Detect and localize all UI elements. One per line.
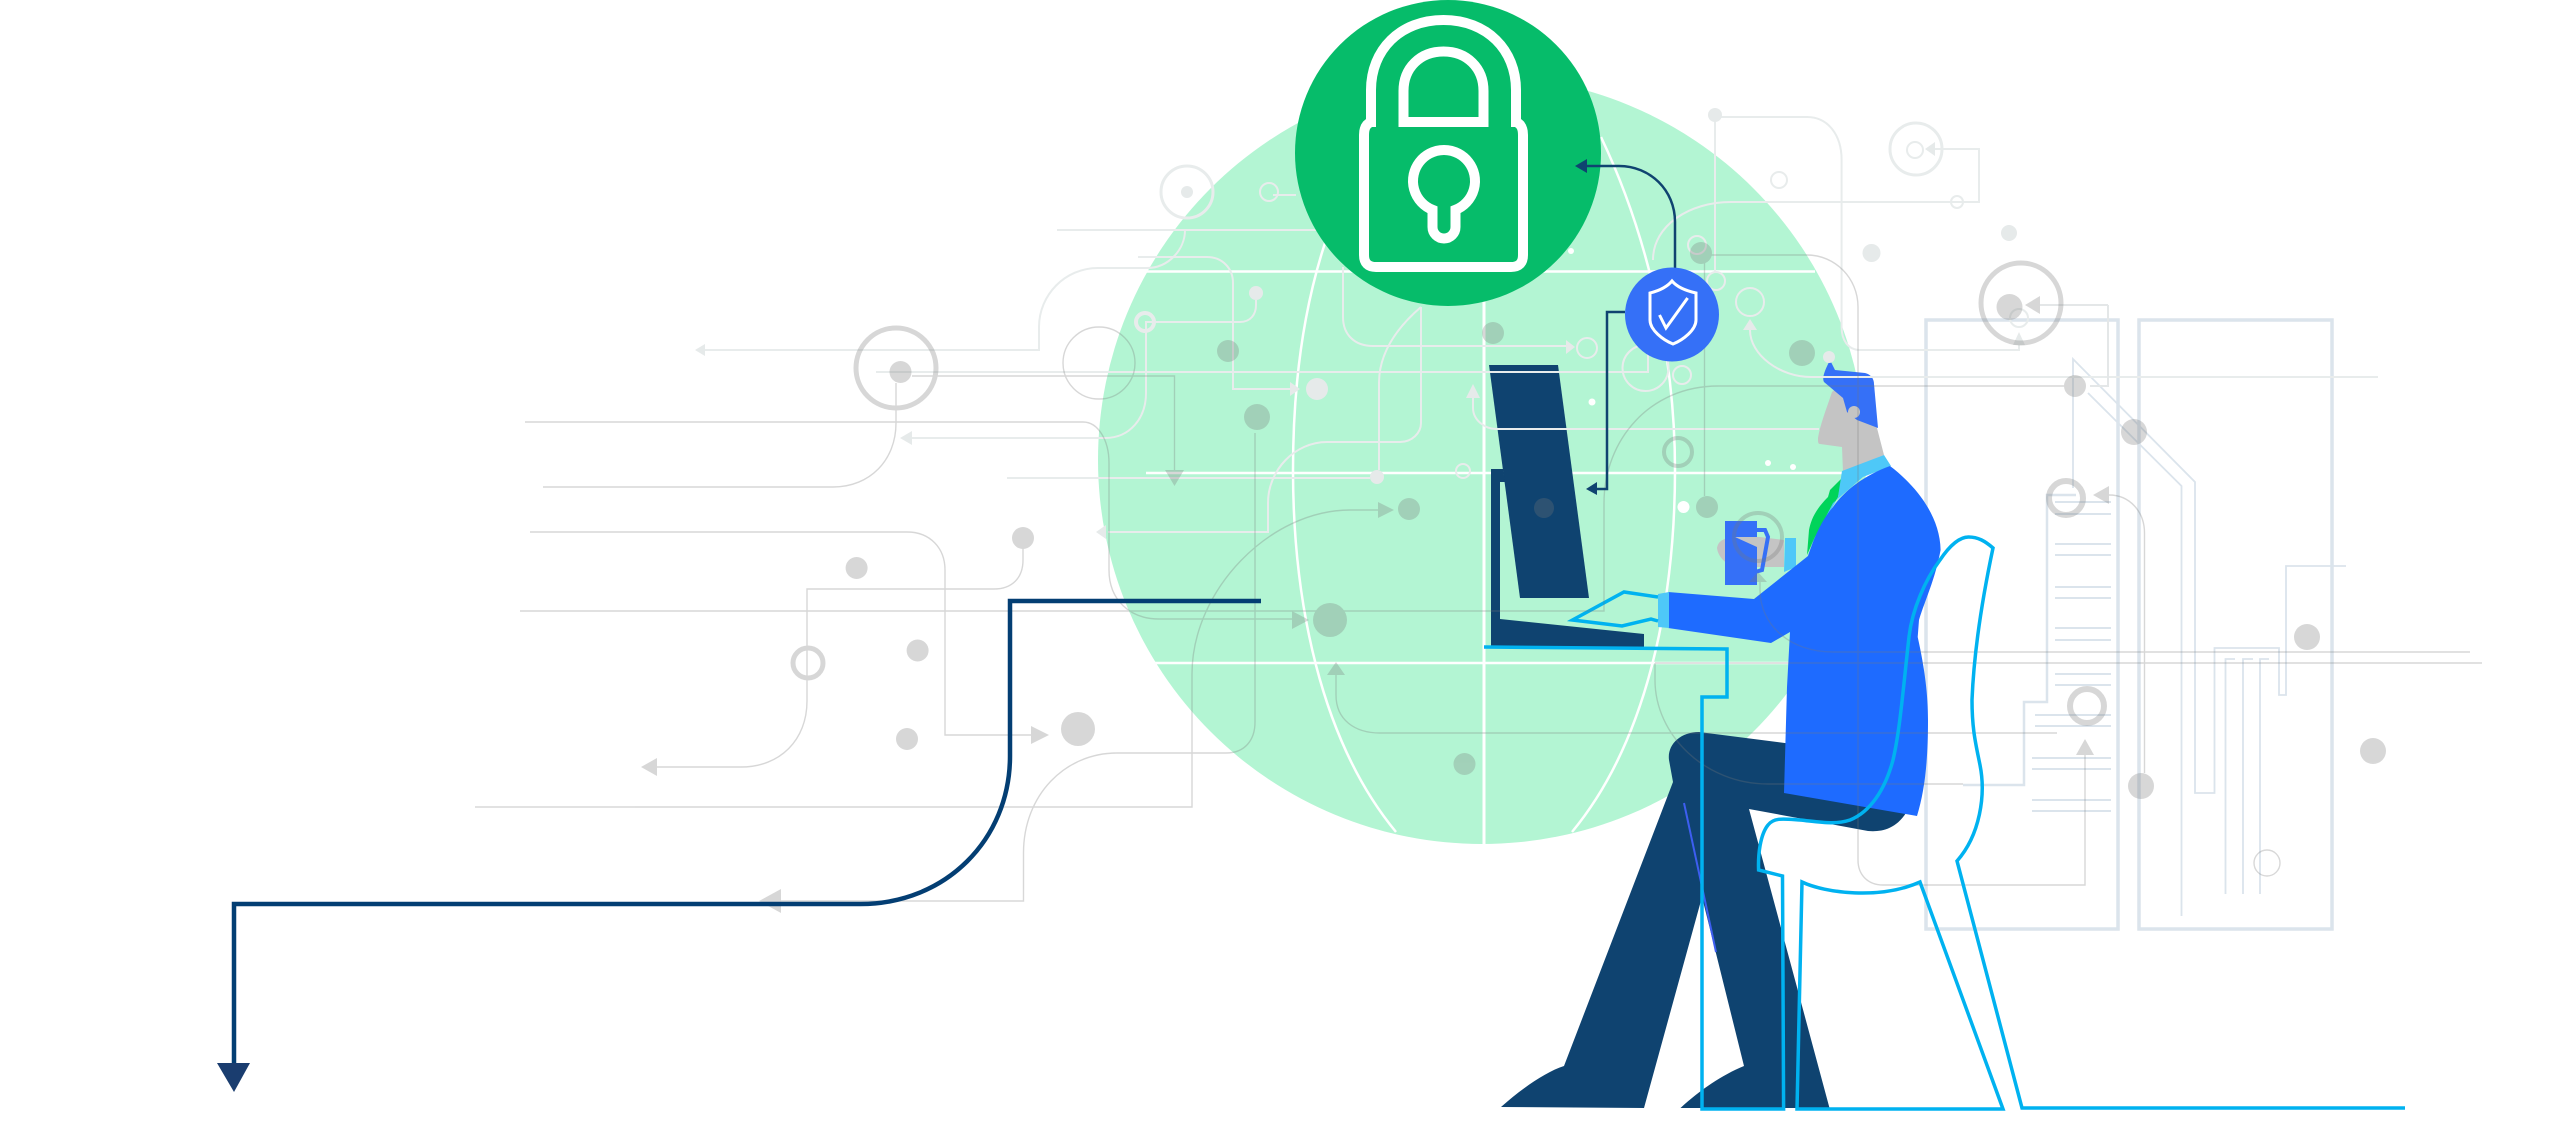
hair <box>1823 360 1878 428</box>
panel: server racks <box>1926 320 2346 929</box>
icon: blue shield badge <box>1625 268 1719 362</box>
arrow: shield to lock <box>1575 159 1675 268</box>
monitor <box>1489 365 1589 598</box>
collar <box>1810 455 1891 547</box>
mug <box>1725 521 1757 585</box>
jacket <box>1668 466 1941 816</box>
network dots and arrows: light <box>695 108 2025 539</box>
desk <box>1484 537 2405 1109</box>
icon: seated person <box>1489 360 1941 1108</box>
ear <box>1848 406 1860 418</box>
legs <box>1501 732 1906 1108</box>
typing cuff <box>1658 592 1669 628</box>
leg highlight <box>1684 803 1716 952</box>
hand holding mug <box>1717 537 1784 567</box>
icon: chair and desk outline <box>1484 537 2405 1109</box>
chair seat and leg <box>1797 882 2003 1109</box>
network lines: grey overlay <box>475 242 2482 913</box>
icon: green lock <box>1295 0 1601 306</box>
globe <box>1098 76 1866 844</box>
cuff on raised hand <box>1784 538 1796 572</box>
tie <box>1807 478 1842 555</box>
head <box>1818 385 1884 472</box>
typing hand outline <box>1572 592 1658 626</box>
arrow: shield to monitor <box>1586 312 1625 495</box>
monitor stand <box>1491 469 1644 647</box>
mug handle <box>1755 530 1768 572</box>
main navy connector arrow <box>217 601 1261 1092</box>
network lines: light <box>705 115 2378 532</box>
